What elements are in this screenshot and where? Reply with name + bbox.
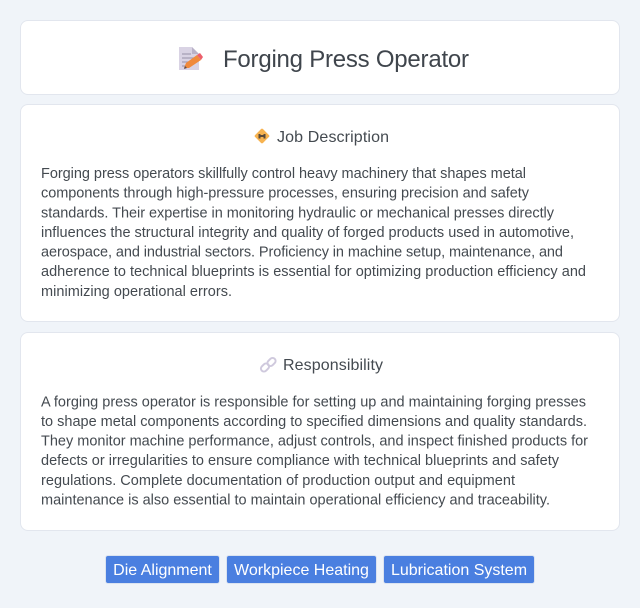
heading: responsibility: Responsibility: [283, 357, 383, 374]
panel: responsibility: [20, 332, 620, 531]
text block: job description: [41, 166, 586, 300]
icon: road sign diamond: [254, 128, 270, 144]
tag: die alignment: [105, 555, 220, 584]
tag: workpiece heating: Workpiece Heating: [234, 562, 369, 579]
text block: responsibility: They monitor machine performance, adjust controls, and inspect finished products for: [41, 434, 588, 450]
panel: title card: [20, 20, 620, 95]
tag: workpiece heating: [226, 555, 377, 584]
title: Forging Press Operator: [223, 46, 469, 73]
text block: job description: adherence to technical blueprints is essential for optimizing production efficiency and: [41, 264, 586, 280]
tag: lubrication system: Lubrication System: [391, 562, 527, 579]
text block: job description: components through high-pressure processes, ensuring precision and safety: [41, 186, 530, 202]
text block: job description: standards. Their expertise in monitoring hydraulic or mechanical presses directly: [41, 206, 555, 222]
text block: responsibility: maintenance is also essential to maintain operational efficiency and traceability.: [41, 492, 550, 508]
text block: responsibility: A forging press operator is responsible for setting up and maintaining forging presses: [41, 394, 586, 410]
text block: job description: influences the structural integrity and quality of forged products used in automotive,: [41, 225, 574, 241]
heading: job description: Job Description: [277, 129, 389, 146]
text block: responsibility: defects or irregularities to ensure compliance with technical blueprints and safety: [41, 453, 560, 469]
text block: job description: minimizing operational errors.: [41, 284, 232, 300]
icon: document with pencil: [179, 47, 203, 70]
text block: responsibility: to shape metal components according to specified dimensions and quality standards.: [41, 414, 587, 430]
text block: job description: aerospace, and industrial sectors. Proficiency in machine setup, maintenance, and: [41, 244, 563, 260]
tag: die alignment: Die Alignment: [113, 562, 212, 579]
panel: job description: [20, 104, 620, 322]
tag: lubrication system: [383, 555, 535, 584]
text block: job description: Forging press operators skillfully control heavy machinery that shapes metal: [41, 166, 526, 182]
text block: responsibility: regulations. Complete documentation of production output and equipment: [41, 473, 515, 489]
icon: chain link: [260, 357, 277, 373]
text block: responsibility: [41, 394, 588, 508]
